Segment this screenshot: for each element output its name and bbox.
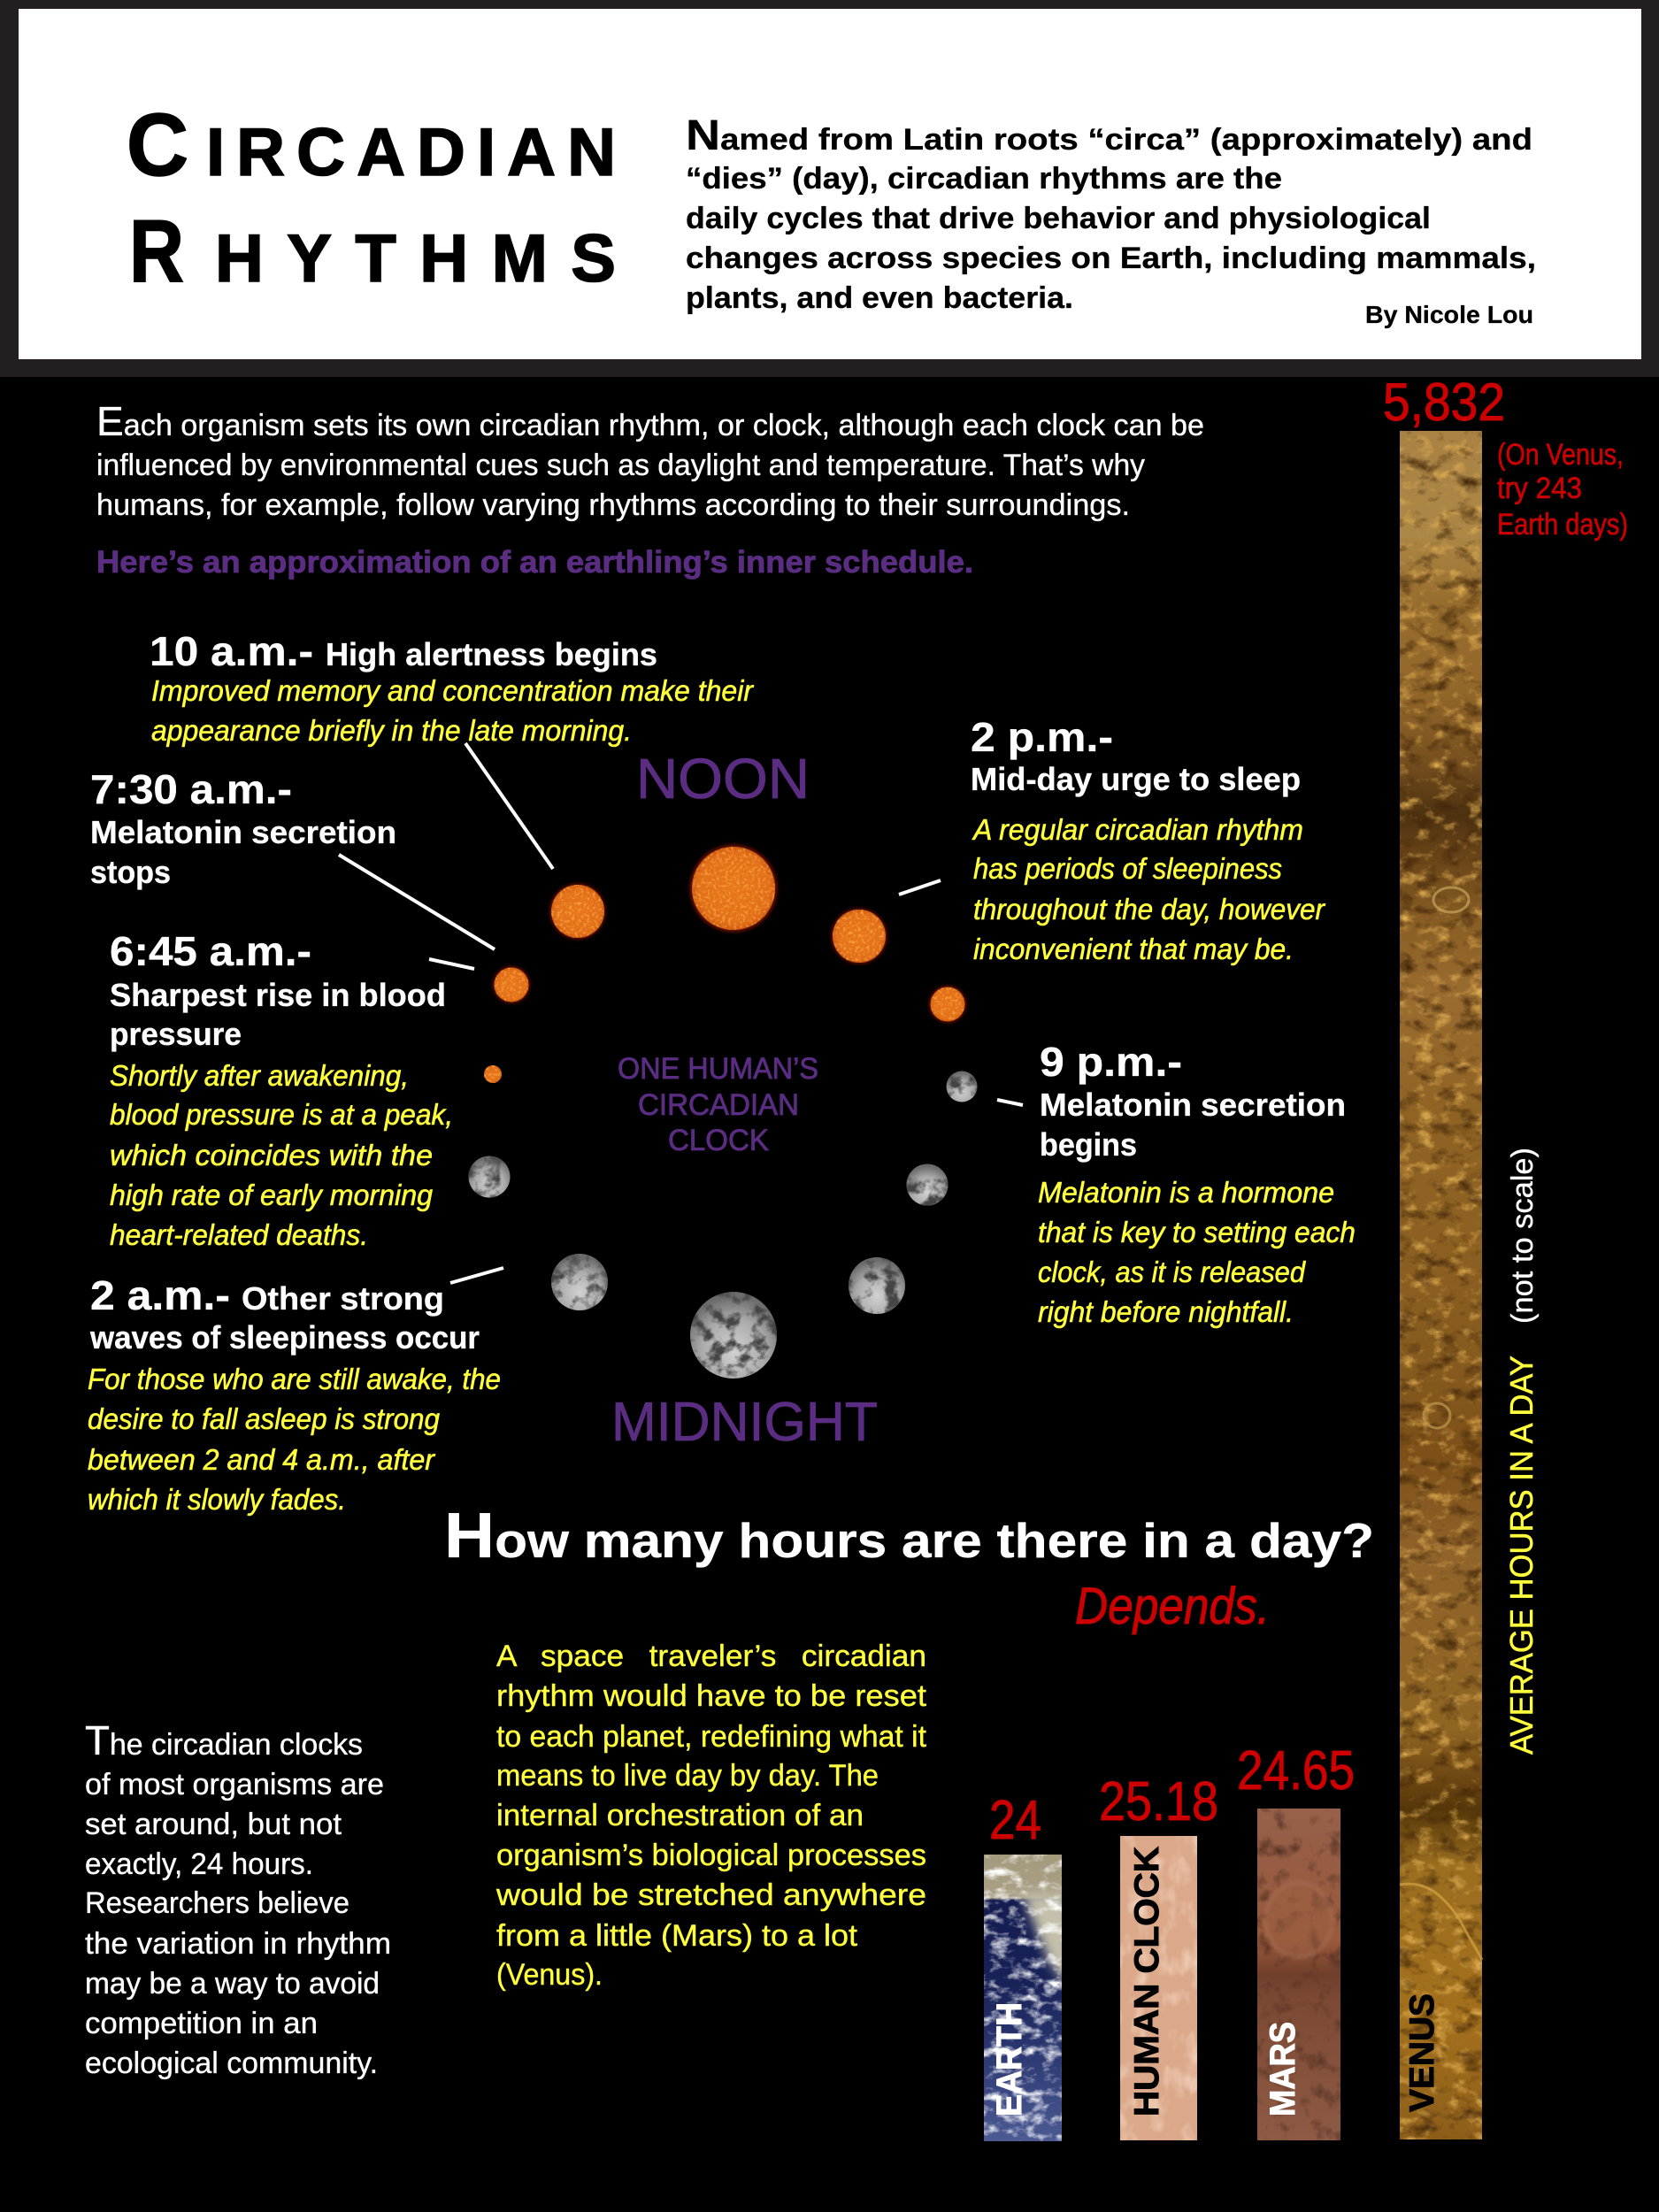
- header description: “dies” (day), circadian rhythms are the: [686, 162, 1282, 196]
- callout: 2 a.m.: waves of sleepiness occur: [89, 1319, 480, 1356]
- bar: human clock: HUMAN CLOCK: [1128, 1847, 1166, 2116]
- icon: 2 a.m. moon: [551, 1254, 608, 1310]
- header panel: [0, 0, 1659, 377]
- callout: 7:30 a.m.: stops: [90, 854, 171, 890]
- title: HYTHMS: [215, 221, 616, 296]
- callout: 2 a.m.: Other strong: [242, 1280, 444, 1317]
- header description: plants, and even bacteria.: [686, 281, 1073, 315]
- yellow paragraph: space traveler: organism’s biological processes: [496, 1839, 926, 1872]
- icon: night moon: [906, 1164, 949, 1205]
- note: venus: [1497, 438, 1628, 541]
- icon: 2 p.m. sun: [832, 909, 887, 964]
- header description: changes across species on Earth, including mammals,: [686, 242, 1536, 275]
- callout: 6:45 a.m.: Shortly after awakening,: [110, 1059, 409, 1092]
- icon: 9 p.m. moon: [947, 1071, 977, 1102]
- bar chart: average hours in a day: [984, 373, 1628, 2141]
- purple subheading: Here’s an approximation of an earthling’s inner schedule.: [96, 545, 973, 580]
- callout: 6:45 a.m.: Sharpest rise in blood: [110, 977, 446, 1013]
- icon: 7:30 a.m. sun: [494, 966, 529, 1003]
- value: earth: 24: [989, 1790, 1041, 1851]
- header description: [686, 112, 1536, 315]
- callout: 2 a.m.: which it slowly fades.: [88, 1483, 346, 1516]
- note: venus: (On Venus,: [1497, 438, 1624, 472]
- circadian clock diagram: [469, 747, 977, 1453]
- yellow paragraph: space traveler: rhythm would have to be reset: [496, 1679, 927, 1713]
- bar: mars: [1257, 1809, 1340, 2140]
- yellow paragraph: space traveler: [495, 1640, 927, 1992]
- callout: 10 a.m.: Improved memory and concentration make their: [151, 674, 755, 707]
- white paragraph: 24 hours: may be a way to avoid: [85, 1967, 380, 2001]
- heading: how many hours: How many hours are there in a day?: [444, 1501, 1374, 1571]
- white paragraph: 24 hours: competition in an: [85, 2007, 318, 2040]
- icon: 10 a.m. sun: [550, 884, 605, 939]
- icon: evening sun: [929, 986, 966, 1023]
- value: human clock: 25.18: [1099, 1771, 1218, 1832]
- callout: 10 a.m.: [150, 628, 755, 747]
- callout: 9 p.m.: 9 p.m.-: [1040, 1039, 1182, 1085]
- callout: 7:30 a.m.: [90, 766, 396, 890]
- callout: 6:45 a.m.: blood pressure is at a peak,: [110, 1098, 453, 1131]
- callout: 9 p.m.: that is key to setting each: [1038, 1216, 1356, 1248]
- yellow paragraph: space traveler: would be stretched anywhere: [495, 1878, 926, 1912]
- yellow paragraph: space traveler: from a little (Mars) to a lot: [496, 1919, 858, 1953]
- clock centre label: [618, 1052, 818, 1157]
- callout: 2 a.m.: 2 a.m.-: [90, 1272, 230, 1318]
- icon: pre-dawn moon: [469, 1156, 510, 1198]
- callout: 6:45 a.m.: heart-related deaths.: [110, 1218, 368, 1251]
- header description: Named from Latin roots “circa” (approximately) and: [686, 112, 1532, 159]
- bar: venus: [1400, 431, 1482, 2139]
- intro paragraph: [96, 398, 1204, 522]
- icon: midnight moon: [690, 1292, 777, 1379]
- bar: earth: EARTH: [990, 2002, 1029, 2116]
- axis note: (not to scale): [1506, 1148, 1540, 1324]
- title: C: [127, 96, 188, 195]
- callout: 10 a.m.: appearance briefly in the late morning.: [151, 714, 632, 747]
- callout: 2 p.m.: has periods of sleepiness: [973, 852, 1282, 885]
- leader line: 2 p.m.: [899, 880, 941, 895]
- yellow paragraph: space traveler: A space traveler’s circadian: [496, 1640, 926, 1673]
- callout: 7:30 a.m.: Melatonin secretion: [90, 814, 396, 850]
- callout: 6:45 a.m.: pressure: [110, 1016, 242, 1052]
- callout: 6:45 a.m.: which coincides with the: [110, 1139, 433, 1171]
- yellow paragraph: space traveler: to each planet, redefining what it: [496, 1720, 927, 1754]
- callout: 2 p.m.: Mid-day urge to sleep: [971, 761, 1301, 797]
- white paragraph: 24 hours: of most organisms are: [85, 1768, 384, 1801]
- white paragraph: 24 hours: ecological community.: [85, 2047, 378, 2080]
- yellow paragraph: space traveler: internal orchestration of an: [496, 1799, 864, 1832]
- white paragraph: 24 hours: The circadian clocks: [85, 1717, 363, 1763]
- title: IRCADIAN: [206, 115, 616, 190]
- callout: 7:30 a.m.: 7:30 a.m.-: [90, 766, 292, 812]
- callout: 6:45 a.m.: [110, 928, 453, 1251]
- white paragraph: 24 hours: [85, 1717, 391, 2080]
- white paragraph: 24 hours: Researchers believe: [85, 1886, 349, 1920]
- leader line: 2 a.m.: [450, 1268, 503, 1283]
- icon: noon sun: [690, 845, 777, 932]
- value: venus: 5,832: [1383, 373, 1505, 432]
- intro paragraph: influenced by environmental cues such as daylight and temperature. That’s why: [96, 449, 1145, 482]
- axis label: AVERAGE HOURS IN A DAY: [1503, 1356, 1540, 1755]
- callout: 2 a.m.: For those who are still awake, the: [88, 1363, 501, 1395]
- callout: 2 p.m.: 2 p.m.-: [971, 714, 1113, 760]
- yellow paragraph: space traveler: (Venus).: [496, 1958, 603, 1992]
- bar: mars: MARS: [1263, 2022, 1302, 2116]
- icon: late night moon: [849, 1257, 905, 1314]
- intro paragraph: humans, for example, follow varying rhythms according to their surroundings.: [96, 488, 1130, 522]
- leader line: 9 p.m.: [997, 1100, 1023, 1105]
- leader line: 7:30 a.m.: [339, 855, 495, 949]
- callout: 6:45 a.m.: high rate of early morning: [110, 1179, 434, 1211]
- callout: 2 p.m.: throughout the day, however: [973, 893, 1326, 926]
- callout: 2 p.m.: inconvenient that may be.: [973, 933, 1294, 965]
- callout: 9 p.m.: [1038, 1039, 1356, 1328]
- clock centre label: CIRCADIAN: [638, 1088, 799, 1122]
- bar: earth: [984, 1855, 1062, 2141]
- callout: 6:45 a.m.: 6:45 a.m.-: [110, 928, 311, 974]
- note: venus: try 243: [1497, 472, 1582, 505]
- callout: 9 p.m.: begins: [1040, 1126, 1137, 1163]
- callout: 9 p.m.: right before nightfall.: [1038, 1295, 1294, 1328]
- bar: human clock: [1120, 1836, 1197, 2140]
- callout: 2 a.m.: desire to fall asleep is strong: [88, 1402, 441, 1435]
- callout: 9 p.m.: clock, as it is released: [1038, 1256, 1307, 1288]
- yellow paragraph: space traveler: means to live day by day. The: [496, 1759, 879, 1793]
- label: midnight: MIDNIGHT: [611, 1392, 878, 1453]
- clock centre label: CLOCK: [668, 1124, 769, 1157]
- clock centre label: ONE HUMAN’S: [618, 1052, 818, 1086]
- icon: dawn sun: [484, 1065, 502, 1083]
- white paragraph: 24 hours: exactly, 24 hours.: [85, 1847, 313, 1881]
- byline: By Nicole Lou: [1365, 301, 1533, 328]
- note: venus: Earth days): [1497, 508, 1628, 541]
- callout: 2 p.m.: A regular circadian rhythm: [972, 813, 1303, 846]
- header description: daily cycles that drive behavior and physiological: [686, 202, 1431, 235]
- white paragraph: 24 hours: the variation in rhythm: [85, 1927, 391, 1961]
- callout: 2 p.m.: [971, 714, 1326, 965]
- value: mars: 24.65: [1237, 1740, 1355, 1801]
- bar: venus: VENUS: [1403, 1993, 1441, 2112]
- callout: 2 a.m.: between 2 and 4 a.m., after: [88, 1443, 436, 1476]
- leader line: 6:45 a.m.: [429, 959, 474, 969]
- label: noon: NOON: [636, 747, 810, 810]
- red answer: depends: Depends.: [1075, 1578, 1270, 1635]
- white paragraph: 24 hours: set around, but not: [85, 1808, 342, 1841]
- callout: 10 a.m.: 10 a.m.-: [150, 628, 313, 674]
- callout: 2 a.m.: [88, 1272, 501, 1516]
- callout: 10 a.m.: High alertness begins: [326, 636, 657, 672]
- callout: 9 p.m.: Melatonin is a hormone: [1038, 1176, 1334, 1209]
- title: R: [129, 202, 184, 301]
- leader line: 10 a.m.: [465, 743, 553, 869]
- callout: 9 p.m.: Melatonin secretion: [1040, 1087, 1346, 1123]
- title: [127, 96, 616, 301]
- intro paragraph: Each organism sets its own circadian rhythm, or clock, although each clock can be: [96, 398, 1204, 444]
